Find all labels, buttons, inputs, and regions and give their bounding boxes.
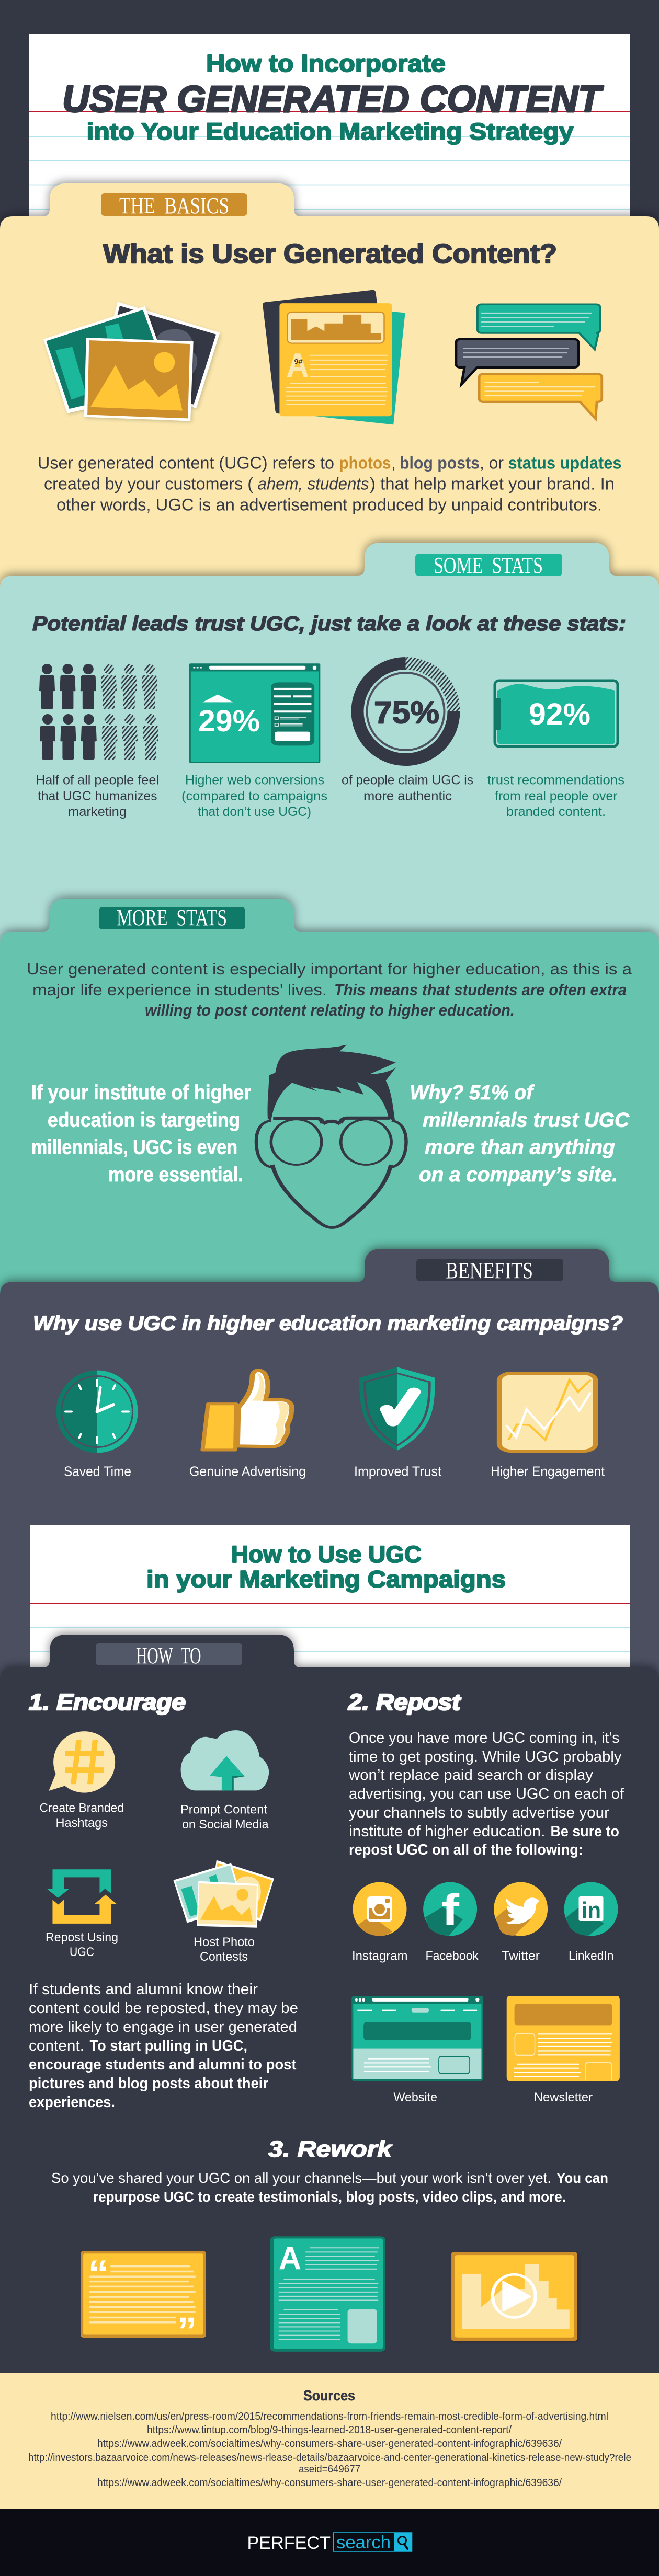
text: repost paragraph: advertising, you can use UGC on each of [349,1786,624,1802]
text: repost paragraph: won’t replace paid search or display [348,1767,594,1784]
how-to paper [30,1525,630,1682]
label: hashtags: Create Branded [40,1801,124,1815]
panel: sources [0,2373,659,2509]
icon: testimonial document: ” [177,2309,197,2352]
text: repost paragraph: Once you have more UGC coming in, it’s [349,1730,619,1746]
icon: testimonial document [81,2251,206,2352]
text: encourage paragraph: If students and alumni know their [29,1981,258,1998]
icon: facebook: f [441,1885,460,1935]
label: hashtags: Hashtags [55,1816,108,1830]
text: UGC definition: ) that help market your brand. In [370,475,615,493]
label: repost using [46,1930,118,1959]
label: host photo: Host Photo [194,1935,255,1949]
text: rework paragraph: repurpose UGC to create testimonials, blog posts, video clips, and more. [93,2189,566,2205]
text: encourage paragraph: experiences. [29,2094,115,2111]
caption: recommendations: trust recommendations [487,773,624,787]
text: millennials right: more than anything [425,1136,615,1158]
caption: recommendations: from real people over [495,789,617,803]
source links: http://investors.bazaarvoice.com/news-releases/news-rlease-details/bazaarvoice-and-center-generational-kinetics-release-new-study?rele [28,2452,631,2464]
text: UGC definition: photos [339,454,391,473]
text: UGC definition: ahem, students [257,475,369,493]
panel: the basics [0,183,659,627]
text: encourage paragraph: encourage students and alumni to post [29,2056,297,2073]
icon: blog article [270,2236,385,2352]
icon: photo contests [173,1860,274,1928]
icon: shield [359,1367,435,1451]
icon: student head with glasses [256,1044,406,1227]
label: host photo [194,1935,255,1964]
text: repost paragraph: time to get posting. While UGC probably [349,1749,622,1765]
label: hashtags [40,1801,124,1830]
text: millennials right: Why? 51% of [410,1082,535,1104]
icon: clock [56,1371,138,1453]
label: repost using: Repost Using [46,1930,118,1945]
source links: https://www.adweek.com/socialtimes/why-consumers-share-user-generated-content-infographic/639636/ [97,2438,562,2450]
text: millennials left: more essential. [108,1164,243,1186]
label: higher engagement: Higher Engagement [491,1464,605,1479]
icon: status updates [456,304,602,419]
text: millennials right [410,1082,630,1186]
text: millennials left: education is targeting [48,1109,240,1131]
icon: photos [43,302,220,421]
label: prompt content [180,1802,269,1832]
caption: humanizes: Half of all people feel [36,773,159,787]
text: UGC definition: created by your customers ( [44,475,253,493]
icon: blog post: 9# [294,358,303,365]
icon: linkedin: in [582,1898,601,1923]
text: repost paragraph: institute of higher education. [349,1823,545,1840]
heading: why use UGC: Why use UGC in higher education marketing campaigns? [33,1312,623,1335]
panel: benefits [0,1249,659,1725]
heading: 2. repost: 2. Repost [348,1689,462,1715]
text: repost paragraph: repost UGC on all of the following: [349,1842,583,1858]
title line 3: into Your Education Marketing Strategy [87,118,573,145]
text: UGC definition: , or [480,454,504,473]
heading: 1. encourage: 1. Encourage [29,1689,186,1715]
heading: how to use: How to Use UGC [231,1541,422,1568]
label: twitter: Twitter [502,1949,540,1963]
tab label: more stats: MORE STATS [117,905,227,930]
panel: more stats [0,899,659,1307]
caption: web conversions: Higher web conversions [185,773,324,787]
label: prompt content: on Social Media [182,1818,269,1832]
logo: perfect search [247,2533,412,2553]
text: UGC definition: status updates [508,454,621,473]
chart: 75% donut [358,663,454,760]
caption: authentic [342,773,473,803]
icon: newsletter [507,1996,620,2081]
tab label: benefits: BENEFITS [446,1258,533,1283]
icon: thumbs up [202,1370,292,1450]
tab label: how to: HOW TO [136,1643,201,1669]
label: genuine advertising: Genuine Advertising [189,1464,306,1479]
icon: instagram [353,1882,407,1936]
label: website: Website [393,2090,437,2104]
label: linkedin: LinkedIn [569,1949,614,1963]
caption: recommendations: branded content. [506,804,606,819]
logo: perfect search: search [336,2533,391,2552]
source links [28,2411,631,2489]
caption: web conversions: that don’t use UGC) [198,804,311,819]
chart: 75% donut: 75% [374,695,439,730]
text: encourage paragraph: content. [29,2038,84,2054]
heading: potential leads: Potential leads trust UGC, just take a look at these stats: [32,613,626,635]
panel: some stats [0,543,659,967]
label: newsletter: Newsletter [534,2090,593,2104]
icon: blog post: A [286,347,309,384]
text: higher education: major life experience in students’ lives. [32,981,327,999]
label: repost using: UGC [70,1945,94,1959]
icon: blog post [263,290,405,424]
text: UGC definition [38,454,621,514]
caption: humanizes: marketing [68,804,127,819]
text: encourage paragraph: pictures and blog posts about their [29,2075,268,2092]
text: UGC definition: blog posts [400,454,480,473]
how-to paper: in your Marketing Campaigns [146,1566,506,1592]
logo: perfect search: PERFECT [247,2533,331,2553]
label: improved trust: Improved Trust [354,1464,442,1479]
text: UGC definition: , [391,454,396,473]
caption: recommendations [487,773,624,819]
source links: https://www.tintup.com/blog/9-things-learned-2018-user-generated-content-report/ [147,2424,512,2436]
icon: hashtag bubble [49,1731,115,1793]
text: encourage paragraph: more likely to engage in user generated [29,2019,297,2036]
title paper [29,34,630,222]
text: millennials left: millennials, UGC is even [31,1136,237,1158]
text: repost paragraph: your channels to subtly advertise your [349,1804,609,1821]
icon: facebook [423,1882,477,1936]
text: rework paragraph: So you’ve shared your UGC on all your channels—but your work isn’t over yet. [51,2170,551,2186]
icon: testimonial document: “ [88,2252,109,2295]
label: saved time: Saved Time [64,1464,131,1479]
label: prompt content: Prompt Content [180,1802,267,1817]
icon: people, half filled [39,664,158,760]
icon: blog article: A [279,2240,301,2276]
text: repost paragraph [348,1730,624,1858]
caption: web conversions [181,773,327,819]
text: encourage paragraph [29,1981,298,2111]
text: higher education [27,960,632,1019]
text: UGC definition: User generated content (UGC) refers to [38,454,334,473]
text: millennials right: millennials trust UGC [423,1109,630,1131]
text: encourage paragraph: To start pulling in UGC, [90,2038,247,2054]
text: repost paragraph: Be sure to [550,1823,619,1840]
tab label: how to [96,1643,242,1669]
text: UGC definition: other words, UGC is an advertisement produced by unpaid contributors. [56,496,602,514]
tab label: some stats: SOME STATS [434,553,543,578]
source links: http://www.nielsen.com/us/en/press-room/2015/recommendations-from-friends-remain-most-credible-form-of-advertising.html [51,2411,608,2422]
label: facebook: Facebook [426,1949,479,1963]
text: higher education: User generated content is especially important for higher education, as this is a [27,960,632,978]
text: rework paragraph [51,2170,608,2205]
caption: humanizes [36,773,159,819]
panel: how to [0,1635,659,2384]
heading: sources: Sources [303,2387,355,2404]
icon: web conversions window [189,663,320,763]
icon: tablet 92%: 92% [529,697,590,731]
title line 2: USER GENERATED CONTENT [62,79,604,120]
icon: upload cloud [181,1730,269,1790]
text: millennials left: If your institute of higher [31,1082,251,1104]
heading: what is UGC: What is User Generated Content? [103,239,557,269]
icon: tablet 92% [495,681,618,746]
footer [0,2509,659,2576]
label: instagram: Instagram [352,1949,408,1963]
text: encourage paragraph: content could be reposted, they may be [29,2000,298,2017]
icon: engagement chart [499,1373,596,1451]
heading: 3. rework: 3. Rework [268,2136,393,2162]
icon: video clip [451,2252,577,2341]
caption: humanizes: that UGC humanizes [38,789,157,803]
caption: authentic: more authentic [363,789,452,803]
caption: authentic: of people claim UGC is [342,773,473,787]
caption: web conversions: (compared to campaigns [181,789,327,803]
icon: linkedin [564,1882,618,1936]
tab label: the basics: THE BASICS [119,193,229,218]
icon: twitter [494,1882,548,1936]
stat: 29%: 29% [198,704,260,738]
source links: aseid=649677 [299,2464,360,2475]
icon: repost arrows [47,1869,117,1924]
icon: website [351,1996,483,2081]
label: host photo: Contests [200,1950,248,1964]
text: millennials right: on a company’s site. [419,1164,618,1186]
title line 1: How to Incorporate [206,50,446,77]
source links: https://www.adweek.com/socialtimes/why-consumers-share-user-generated-content-infographic/639636/ [97,2477,562,2489]
text: higher education: willing to post content relating to higher education. [145,1001,515,1019]
text: higher education: This means that students are often extra [334,981,627,999]
text: millennials left [31,1082,251,1186]
text: rework paragraph: You can [556,2170,608,2186]
